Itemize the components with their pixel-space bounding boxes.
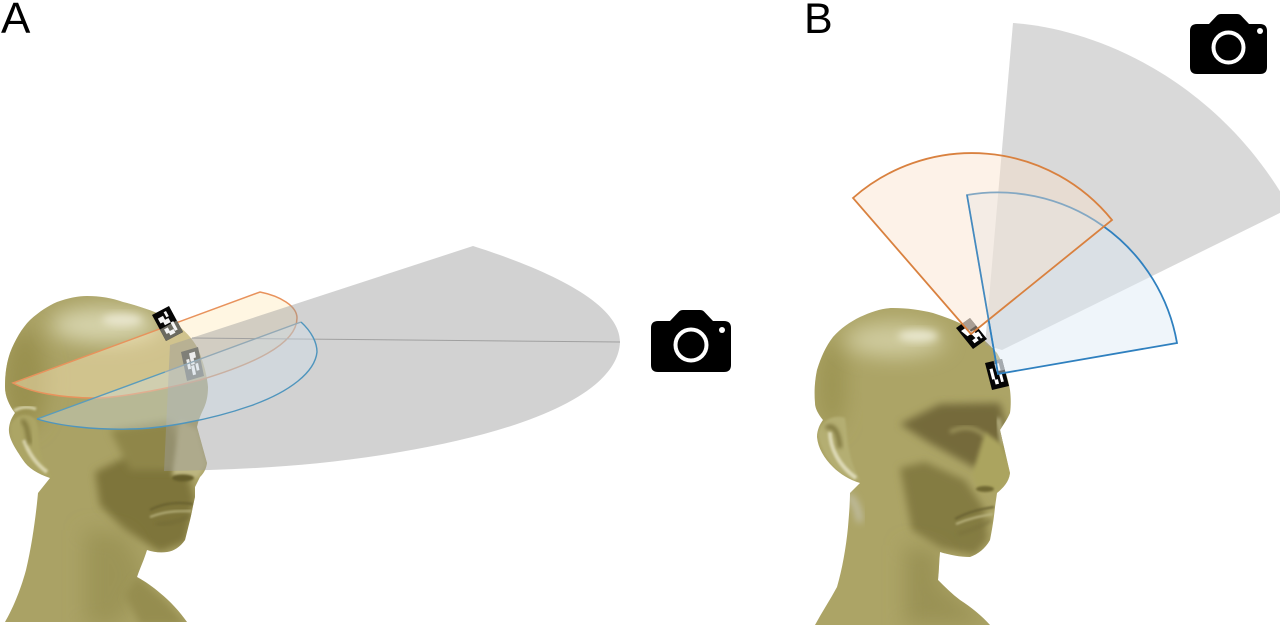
fiducial marker top A (152, 306, 183, 341)
fiducial marker top B (956, 318, 987, 349)
gray camera sector A (164, 246, 620, 471)
icon: camera A (651, 310, 731, 372)
mannequin head B (810, 300, 1015, 628)
fiducial marker lower A (181, 347, 204, 381)
orange sector A (13, 292, 297, 398)
cheek shadow (900, 462, 988, 555)
gray camera sector B (985, 23, 1280, 350)
nose (972, 432, 1011, 490)
nose (172, 420, 207, 478)
eye socket (900, 403, 1006, 468)
panel A: mannequin head with orientation sectors (0, 246, 620, 625)
mannequin head A (0, 290, 215, 625)
ear (818, 417, 860, 480)
camera axis line A (192, 338, 620, 342)
orange sector B (853, 153, 1112, 334)
blue sector B (967, 192, 1177, 374)
panel B: mannequin head with orientation sectors (810, 23, 1280, 628)
blue sector left edge B (967, 195, 998, 374)
neck (905, 545, 990, 625)
mouth (150, 503, 193, 510)
fiducial marker lower B (985, 359, 1009, 390)
ear (13, 415, 47, 477)
blue sector A (37, 322, 317, 429)
icon: camera B (1190, 14, 1267, 74)
mouth (955, 507, 994, 519)
